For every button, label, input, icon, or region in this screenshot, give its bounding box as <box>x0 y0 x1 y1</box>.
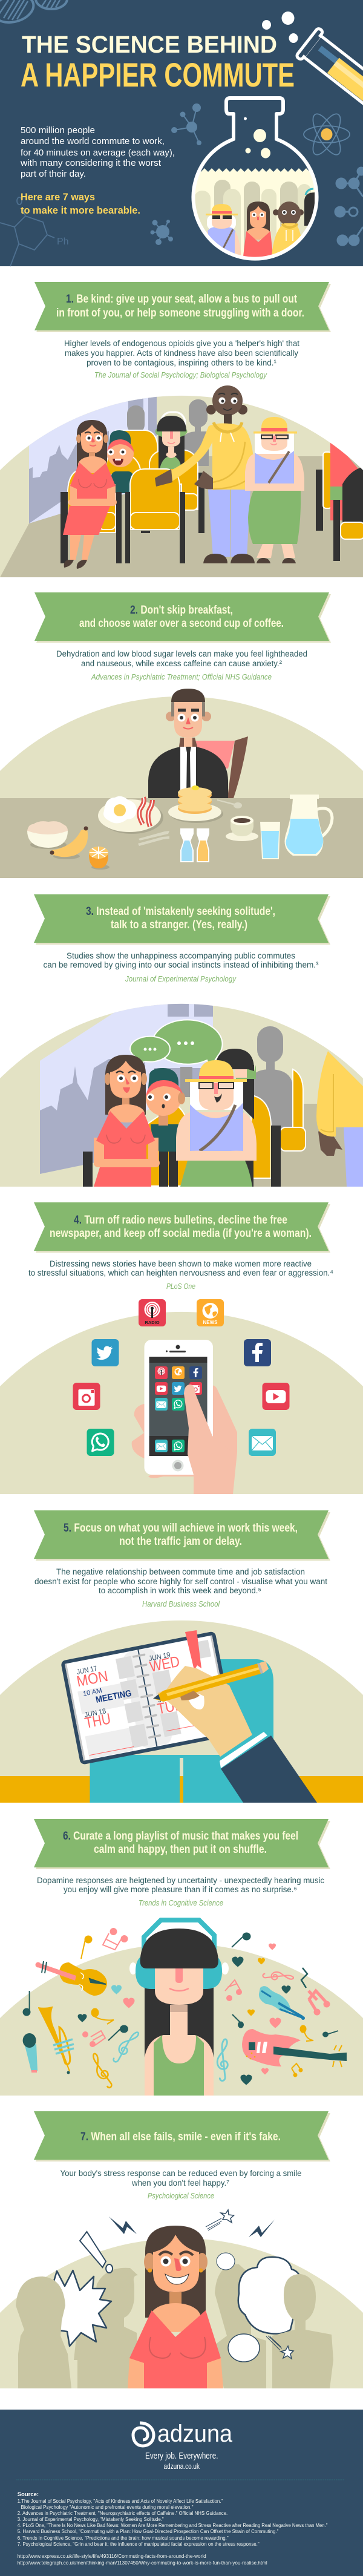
heading: tip 6 <box>63 1830 298 1856</box>
icon: instagram app <box>73 1383 100 1410</box>
panel: tip 2 <box>0 592 363 878</box>
chair <box>192 736 248 798</box>
source: tip 2: Advances in Psychiatric Treatment; Official NHS Guidance <box>91 672 272 681</box>
illustration: breakfast table <box>0 689 363 878</box>
source: tip 5: Harvard Business School <box>142 1599 220 1608</box>
woman in red dress <box>63 420 117 569</box>
sources list: 2. Advances in Psychiatric Treatment, "Neuropsychiatric effects of Caffeine." Official NHS Guidance. <box>18 2510 227 2516</box>
ribbon: tip 4 <box>34 1202 330 1253</box>
yellow desk band <box>0 1776 363 1803</box>
heading: tip 3 <box>86 905 275 931</box>
kid listening <box>146 1068 185 1152</box>
illustration: girl with headphones and music <box>0 1920 363 2096</box>
icon: news app: NEWS <box>203 1320 218 1325</box>
text: tip 2: and nauseous, while excess caffeine can cause anxiety.² <box>81 659 282 668</box>
source: tip 1: The Journal of Social Psychology; Biological Psychology <box>94 370 267 379</box>
text: tip 3 <box>44 951 319 969</box>
banana <box>50 827 88 859</box>
planner dates: 10 AM <box>82 1687 103 1698</box>
condiment bottles <box>180 828 209 862</box>
panel: tip 5 <box>0 1510 363 1803</box>
intro text: part of their day. <box>21 169 86 179</box>
grey passengers <box>180 1026 293 1141</box>
heading: tip 6: 6. Curate a long playlist of music that makes you feel <box>63 1830 298 1843</box>
seat poles <box>83 1126 281 1187</box>
intro callout: Here are 7 ways <box>21 191 95 203</box>
instrument: microphone <box>23 2033 38 2073</box>
background dome <box>0 396 363 577</box>
heading: tip 4 <box>50 1214 312 1240</box>
woman in red dress talking <box>94 1055 160 1187</box>
icon: atom <box>304 110 350 159</box>
heading: tip 1: 1. Be kind: give up your seat, allow a bus to pull out <box>66 293 298 306</box>
hearts left <box>77 1985 134 2022</box>
background dome <box>0 1944 363 2096</box>
music notes right <box>217 1933 338 2081</box>
sources list: http://www.telegraph.co.uk/men/thinking-man/11307450/Why-commuting-to-work-is-more-fun-than-you-realise.html <box>18 2560 267 2566</box>
illustration: bus interior <box>0 385 363 577</box>
music notes left <box>23 1928 140 2089</box>
icon: flask contents with commuters <box>195 168 315 257</box>
heading: tip 4: newspaper, and keep off social media (if you're a woman). <box>50 1227 312 1240</box>
water glass <box>260 822 280 859</box>
heading: tip 3: 3. Instead of 'mistakenly seeking solitude', <box>86 905 275 918</box>
bus window and floor <box>40 1003 347 1187</box>
hearts right <box>232 1944 290 2085</box>
table <box>0 798 363 878</box>
intro text: for 40 minutes on average (each way), <box>21 148 175 158</box>
heading: tip 1: in front of you, or help someone struggling with a door. <box>56 307 304 320</box>
instrument: blue violin <box>259 1986 305 2020</box>
text: tip 7: when you don't feel happy.⁷ <box>131 2178 229 2188</box>
sources list: 7. Psychological Science, "Grin and bear it: the influence of manipulated facial expression on the stress response." <box>18 2541 260 2547</box>
silhouette: first person <box>16 2276 71 2388</box>
text: tip 7 <box>60 2169 301 2188</box>
icon: bubbles above flask <box>262 11 298 43</box>
text: tip 1: proven to be contagious, inspiring others to be kind.¹ <box>87 358 276 367</box>
man in hoodie at right <box>316 1051 363 1187</box>
sources list: Biological Psychology "Autonomic and prefrontal events during moral elevation." <box>21 2504 194 2510</box>
logo: adzuna: adzuna <box>157 2420 233 2447</box>
text: tip 7: Your body's stress response can be reduced even by forcing a smile <box>60 2169 301 2178</box>
icon: burst speech shape <box>48 2270 111 2346</box>
sources list: 6. Trends in Cognitive Science, "Predictions and the brain: how musical sounds become rewarding." <box>18 2535 229 2541</box>
icon: medium smoke cloud <box>228 2334 260 2362</box>
icon: test tube <box>296 28 363 125</box>
phone app icons <box>155 1366 202 1452</box>
text: tip 4 <box>28 1259 333 1277</box>
planner dates: JUN 18 <box>83 1706 107 1719</box>
ribbon: tip 2 <box>34 592 331 643</box>
panel: header <box>0 0 363 269</box>
silhouette: fourth person <box>272 2274 333 2388</box>
illustration: phone and apps <box>0 1299 363 1494</box>
pencil <box>153 1661 269 1702</box>
text: tip 4: Distressing news stories have been shown to make women more reactive <box>50 1259 312 1268</box>
text: tip 3: can be removed by giving into our social instincts instead of inhibiting them.³ <box>44 960 319 969</box>
intro text <box>20 125 175 179</box>
girl with headphones <box>129 1920 229 2096</box>
planner dates: MEETING <box>95 1688 132 1705</box>
text: tip 6: Dopamine responses are heigtened by uncertainty - unexpectedly hearing music <box>37 1876 324 1885</box>
sources list: 4. PLoS One, "There Is No News Like Bad News: Women Are More Remembering and Stress Reactive after Reading Real Negative News than Men." <box>18 2522 327 2528</box>
planner <box>60 1631 235 1765</box>
illustration: talking on the bus <box>0 992 363 1187</box>
text: tip 1: makes you happier. Acts of kindness have also been scientifically <box>65 349 298 358</box>
old woman with hat <box>245 417 304 563</box>
standing man in hoodie <box>155 385 255 563</box>
cutlery <box>138 831 169 846</box>
source: tip 3: Journal of Experimental Psychology <box>125 974 237 983</box>
heading: tip 5: 5. Focus on what you will achieve in work this week, <box>64 1522 298 1535</box>
panel: tip 6 <box>0 1819 363 2096</box>
spoon <box>217 799 242 808</box>
text: tip 5: doesn't exist for people who score highly for self control - visualise what you want <box>34 1577 327 1586</box>
panel: tip 4 <box>0 1202 363 1494</box>
food: pancake plate <box>168 785 223 823</box>
grey passengers <box>122 399 209 472</box>
thumb and palm <box>184 1385 233 1494</box>
writing hand <box>157 1666 252 1757</box>
text: tip 5 <box>34 1567 327 1595</box>
tagline: Every job. Everywhere. <box>145 2451 218 2461</box>
icon: molecule lower <box>151 220 172 244</box>
oat bowl <box>27 821 68 849</box>
icon: mail app <box>249 1429 276 1456</box>
intro text: with many considering it the worst <box>20 158 162 168</box>
text: tip 1 <box>64 339 299 367</box>
icon: news app <box>197 1299 224 1326</box>
panel: tip 3 <box>0 894 363 1187</box>
website: adzuna.co.uk <box>163 2462 200 2471</box>
planner dates <box>74 1648 189 1732</box>
intro text: 500 million people <box>21 125 95 136</box>
illustration: planner and hand <box>0 1621 363 1803</box>
icon: whatsapp app <box>87 1429 114 1456</box>
source: tip 4: PLoS One <box>166 1282 195 1291</box>
sources list: 5. Harvard Business School, "Commuting with a Plan: How Goal-Directed Prospection Can Offset the Strain of Commuting." <box>18 2528 278 2534</box>
planner dates: MON <box>75 1668 110 1690</box>
text: tip 1: Higher levels of endogenous opioids give you a 'helper's high' that <box>64 339 299 348</box>
icon: molecule upper <box>172 104 201 145</box>
icon: right molecule <box>335 168 363 245</box>
ribbon: tip 3 <box>34 894 330 945</box>
instrument: pink guitar <box>242 2029 347 2067</box>
icon: flask outline <box>194 98 317 259</box>
back seats <box>106 430 198 510</box>
intro text: around the world commute to work, <box>21 136 165 146</box>
silhouette: second person <box>74 2268 139 2388</box>
icon: chemical structure <box>0 197 54 266</box>
text: tip 5: to accomplish in work this week and beyond.⁵ <box>99 1586 261 1595</box>
sources list: Source: <box>18 2491 39 2498</box>
background dome <box>0 1004 363 1187</box>
title line one: THE SCIENCE BEHIND <box>22 31 277 58</box>
sources list <box>18 2491 327 2566</box>
icon: facebook app <box>244 1339 271 1366</box>
man in suit <box>148 689 228 798</box>
back seats <box>145 1069 306 1186</box>
background dome <box>0 696 363 805</box>
woman with forced smile <box>128 2226 223 2388</box>
icon: small smoke cloud <box>217 2253 235 2270</box>
text: tip 5: The negative relationship between commute time and job satisfaction <box>56 1567 305 1576</box>
background dome <box>0 1621 363 1803</box>
water jug <box>284 795 332 856</box>
ribbon: tip 7 <box>34 2111 330 2161</box>
planner dates: TUE <box>156 1696 185 1718</box>
heading: tip 5: not the traffic jam or delay. <box>119 1535 242 1548</box>
background dome <box>0 2238 363 2388</box>
ribbon: tip 1 <box>34 282 331 332</box>
footer <box>0 2410 363 2576</box>
bookmark <box>185 1630 201 1670</box>
icon: DNA strand <box>0 0 67 27</box>
woman with headphones <box>155 412 188 469</box>
kid in seat <box>107 430 134 493</box>
food: eggs and bacon plate <box>98 796 163 834</box>
heading: tip 6: calm and happy, then put it on shuffle. <box>94 1843 267 1856</box>
heading: tip 2: and choose water over a second cup of coffee. <box>79 617 284 630</box>
source: tip 6: Trends in Cognitive Science <box>139 1898 223 1907</box>
intro callout: to make it more bearable. <box>21 205 140 216</box>
text: tip 6: you enjoy will give more pleasure than if it comes as no surprise.⁶ <box>64 1885 297 1894</box>
icon: lightning left <box>109 2217 137 2234</box>
hand behind phone <box>132 1386 237 1494</box>
heading: tip 2: 2. Don't skip breakfast, <box>130 604 233 617</box>
planner dates: JUN 19 <box>148 1650 171 1663</box>
silhouette: third person <box>215 2264 266 2388</box>
sources list: 1.The Journal of Social Psychology, "Acts of Kindness and Acts of Novelty Affect Life Satisfaction." <box>18 2498 223 2504</box>
ribbon: tip 5 <box>34 1510 330 1561</box>
woman with black hair behind <box>215 1049 256 1126</box>
icon: radio app: RADIO <box>145 1320 160 1325</box>
sources list: 3. Journal of Experimental Psychology, "Mistakenly Seeking Solitude." <box>18 2516 164 2522</box>
coffee cup <box>226 816 258 841</box>
main seats <box>68 469 180 533</box>
planner dates: THU <box>83 1710 112 1732</box>
right passenger and seat <box>323 436 363 561</box>
heading: tip 7: 7. When all else fails, smile - even if it's fake. <box>80 2131 281 2143</box>
panel: tip 7 <box>0 2111 363 2388</box>
speech bubble dots <box>144 1041 194 1050</box>
seat poles <box>60 470 323 563</box>
heading: tip 4: 4. Turn off radio news bulletins, decline the free <box>74 1214 287 1227</box>
icon: exclamation mark <box>80 2232 113 2273</box>
heading: tip 1 <box>56 293 304 320</box>
text: tip 2: Dehydration and low blood sugar levels can make you feel lightheaded <box>56 649 307 658</box>
instrument: trumpet <box>38 2007 74 2074</box>
label: Ph: Ph <box>57 237 69 247</box>
icon: small star with trail <box>266 2336 293 2359</box>
planner dates: JUN 20 <box>157 1692 180 1704</box>
text: tip 4: to stressful situations, which can heighten nervousness and even fear or aggression.⁴ <box>28 1268 333 1277</box>
old woman laughing <box>176 1060 257 1187</box>
intro callout <box>21 191 140 216</box>
background dome <box>0 1312 363 1494</box>
icon: lightning right <box>249 2220 275 2237</box>
teal torso <box>90 1659 273 1803</box>
icon: twitter app <box>92 1339 119 1366</box>
sources list: http://www.express.co.uk/life-style/life/493116/Commuting-facts-from-around-the-world <box>18 2553 206 2559</box>
text: tip 2 <box>56 649 307 668</box>
instrument: violin <box>35 1961 107 1996</box>
source: tip 7: Psychological Science <box>148 2191 214 2200</box>
heading: tip 2 <box>79 604 284 630</box>
icon: radio app <box>139 1299 166 1326</box>
ribbon: tip 6 <box>34 1819 330 1869</box>
orange <box>89 847 110 870</box>
icon: flask bubbles <box>244 117 270 159</box>
panel: tip 1 <box>0 282 363 577</box>
phone <box>144 1340 213 1475</box>
heading: tip 5 <box>64 1522 298 1548</box>
icon: big smoke cloud <box>238 2257 301 2334</box>
icon: shooting star <box>206 2210 234 2230</box>
planner dates: WED <box>148 1653 181 1676</box>
illustration: fake smile among crowd <box>0 2210 363 2388</box>
heading: tip 3: talk to a stranger. (Yes, really.) <box>111 919 247 931</box>
icon: youtube app <box>263 1383 289 1410</box>
text: tip 6 <box>37 1876 324 1894</box>
speech bubbles <box>130 1020 222 1068</box>
text: tip 3: Studies show the unhappiness accompanying public commutes <box>67 951 295 960</box>
bus window and floor <box>0 387 363 577</box>
planner dates: JUN 17 <box>76 1664 98 1676</box>
suit sleeve and cuff <box>220 1732 317 1803</box>
